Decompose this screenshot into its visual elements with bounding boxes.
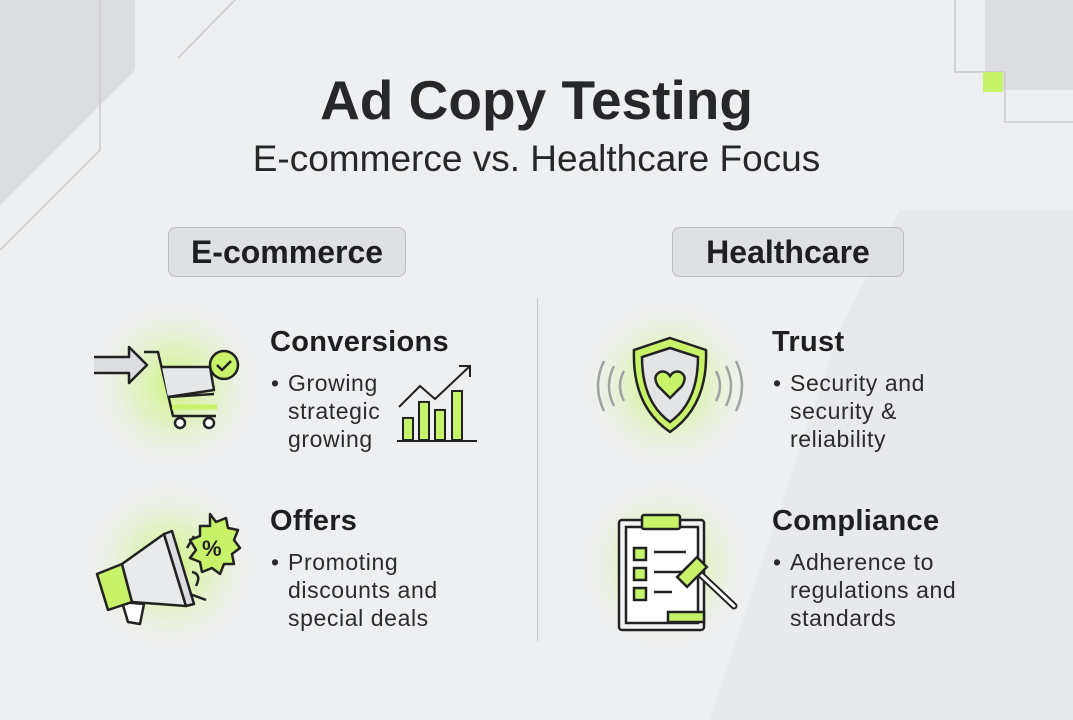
heading: Compliance: Compliance xyxy=(772,505,939,537)
bullet: offers text xyxy=(271,549,438,631)
text: • xyxy=(271,370,280,396)
pill: Healthcare: Healthcare xyxy=(706,234,870,270)
subtitle: E-commerce vs. Healthcare Focus xyxy=(253,138,820,179)
bullet: conversions text: growing xyxy=(288,426,373,452)
bullet: trust text: Security and xyxy=(790,370,925,396)
heading: Trust: Trust xyxy=(772,326,844,358)
bullet: compliance text xyxy=(773,549,956,631)
pill: Healthcare xyxy=(672,227,904,277)
icon: clipboard gavel xyxy=(618,514,738,632)
bullet: trust text: reliability xyxy=(790,426,886,452)
bullet: offers text: Promoting xyxy=(288,549,398,575)
bullet: compliance text: regulations and xyxy=(790,577,956,603)
pill: E-commerce: E-commerce xyxy=(191,234,383,270)
heading: Offers: Offers xyxy=(270,505,357,537)
bullet: offers text: special deals xyxy=(288,605,429,631)
icon: megaphone xyxy=(96,512,242,626)
icon: bar chart xyxy=(397,365,477,442)
bullet: offers text: discounts and xyxy=(288,577,438,603)
title: Ad Copy Testing xyxy=(320,69,753,131)
text: • xyxy=(773,370,782,396)
divider xyxy=(537,298,538,641)
icon: megaphone: % xyxy=(202,536,222,561)
bullet: compliance text: standards xyxy=(790,605,896,631)
bullet: trust text xyxy=(773,370,925,452)
icon: cart xyxy=(94,346,240,430)
bullet: conversions text xyxy=(271,370,380,452)
icon: shield xyxy=(596,336,744,434)
text: • xyxy=(271,549,280,575)
bullet: trust text: security & xyxy=(790,398,897,424)
pill: E-commerce xyxy=(168,227,406,277)
bullet: conversions text: strategic xyxy=(288,398,380,424)
text: • xyxy=(773,549,782,575)
heading: Conversions: Conversions xyxy=(270,326,449,358)
bullet: compliance text: Adherence to xyxy=(790,549,934,575)
bullet: conversions text: Growing xyxy=(288,370,378,396)
